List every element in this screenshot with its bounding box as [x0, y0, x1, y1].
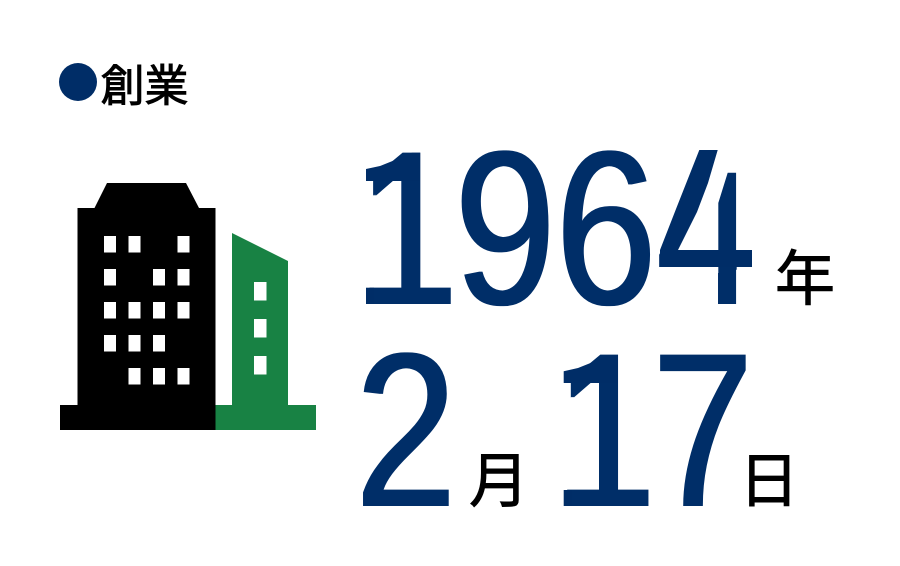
green building	[215, 233, 316, 430]
day: 17日: 17	[555, 306, 753, 553]
day: 17日: 日	[739, 448, 799, 515]
heading: 創業: 創業	[100, 62, 188, 111]
month: 2月: 2	[355, 306, 456, 553]
month: 2月: 月	[469, 448, 529, 515]
year: 1964年: 年	[775, 246, 835, 313]
heading: 創業	[59, 62, 188, 111]
black building	[60, 183, 216, 430]
icon: buildings	[60, 183, 316, 430]
year: 1964年: 1964	[357, 104, 757, 351]
month: 2月	[355, 306, 529, 553]
